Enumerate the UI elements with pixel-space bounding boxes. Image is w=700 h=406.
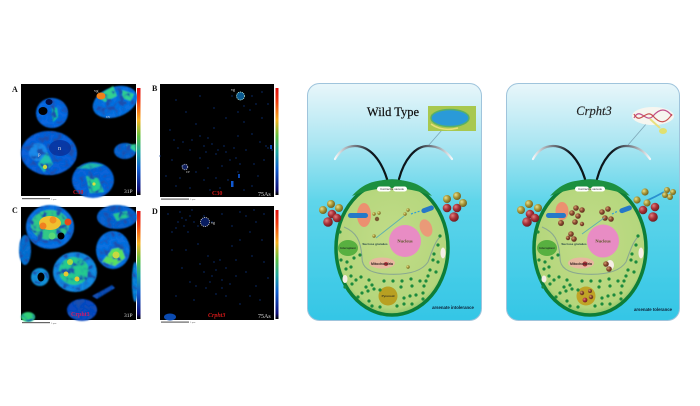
interoplast: Interoplast <box>340 246 356 250</box>
panel: Wild Type model <box>308 84 482 320</box>
panel C details: Crpht3 <box>71 312 90 318</box>
panel A details: n <box>58 146 61 152</box>
panel C details: C <box>12 206 18 215</box>
panel B labels: 5 µm <box>190 198 195 201</box>
panel A details: cv <box>106 114 111 119</box>
panel C: 31P map of Crpht3 <box>12 205 140 325</box>
panel D labels: 75As <box>258 314 271 320</box>
chloroplast outline <box>344 227 441 274</box>
panel D labels: Crpht3 <box>208 313 225 319</box>
panel A details: C30 <box>73 190 83 196</box>
panel D colour bar <box>276 210 278 319</box>
inset: DNA editing <box>628 107 674 145</box>
panel D: 75As map of Crpht3 <box>152 206 278 324</box>
contractile vacuole <box>377 186 407 192</box>
pyrenoid <box>378 286 398 306</box>
contractile vacuole <box>575 186 605 192</box>
green granules <box>340 232 440 307</box>
panel B labels: vg <box>231 87 235 92</box>
sucrose granules label: Sucrose granules <box>561 242 587 246</box>
antennae <box>533 146 650 179</box>
panel A details: p <box>38 153 41 158</box>
panel A details <box>12 85 133 201</box>
cell body <box>534 181 646 315</box>
arsenate spheres left <box>517 200 542 227</box>
interoplast <box>338 240 358 256</box>
panel D labels: vg <box>211 220 215 225</box>
mitochondria: Mitochondria <box>371 262 393 266</box>
panel B speckle <box>160 92 272 190</box>
panel C cells <box>19 205 138 322</box>
heading: Wild Type: Wild Type <box>367 105 420 119</box>
inset: pond habitat <box>428 106 476 146</box>
pyrenoid with arsenic <box>576 286 596 306</box>
panel A: 31P map of C30 <box>12 80 142 201</box>
chloroplast outline <box>542 227 639 274</box>
panel C details: 5 µm <box>51 322 56 325</box>
panel A details: vg <box>94 88 99 93</box>
nucleus <box>389 225 421 257</box>
sucrose granules label: Sucrose granules <box>362 242 388 246</box>
panel C colour bar <box>137 211 140 319</box>
panel: Crpht3 model <box>506 84 680 320</box>
panel B bright spots <box>182 92 272 187</box>
panel B: 75As map of C30 <box>152 84 278 201</box>
contractile vacuole: Contractile vacuole <box>578 187 602 191</box>
panel D labels: 5 µm <box>190 321 195 324</box>
panel A details: 31P <box>124 189 133 195</box>
mitochondria <box>369 258 395 268</box>
panel C details <box>12 206 133 325</box>
heading: Crpht3: Crpht3 <box>576 104 612 118</box>
antennae <box>335 146 452 179</box>
panel B labels: cv <box>186 169 190 174</box>
transporters <box>546 192 664 234</box>
cell body <box>336 181 448 315</box>
white vesicles <box>542 248 644 282</box>
arsenic granules inside the cell <box>558 205 614 272</box>
panel A colour bar <box>137 88 140 195</box>
arsenate spheres right <box>443 192 467 222</box>
panel B labels <box>152 84 271 201</box>
contractile vacuole: Contractile vacuole <box>380 187 404 191</box>
white vesicles <box>342 248 446 283</box>
starch bodies <box>556 202 568 220</box>
panel B labels: C30 <box>212 191 222 197</box>
panel A details: A <box>12 85 18 94</box>
panel A cells <box>21 80 142 198</box>
transporters <box>348 205 435 238</box>
interoplast <box>537 240 557 256</box>
arsenate spheres left <box>319 200 343 227</box>
caption: arsenate intolerance: arsenate intolerance <box>432 305 475 310</box>
nucleus <box>587 224 619 258</box>
panel B labels: B <box>152 84 158 93</box>
panel D labels: D <box>152 207 158 216</box>
panel B labels: 75As <box>258 192 271 198</box>
nucleus: Nucleus <box>595 238 611 244</box>
caption: arsenate tolerance: arsenate tolerance <box>634 307 673 312</box>
arsenate spheres right <box>633 187 676 222</box>
green granules <box>538 232 638 307</box>
nucleus: Nucleus <box>397 238 413 244</box>
pyrenoid: Pyrenoid <box>382 294 395 298</box>
mitochondria <box>568 258 594 268</box>
panel B colour bar <box>276 88 278 195</box>
panel A details: 5 µm <box>51 198 56 201</box>
panel D speckle <box>168 210 268 304</box>
starch bodies <box>357 203 435 269</box>
mitochondria: Mitochondria <box>570 262 592 266</box>
interoplast: Interoplast <box>539 246 555 250</box>
panel D labels <box>152 207 271 324</box>
panel D bright spots <box>164 218 210 320</box>
panel C details: 31P <box>124 313 133 319</box>
